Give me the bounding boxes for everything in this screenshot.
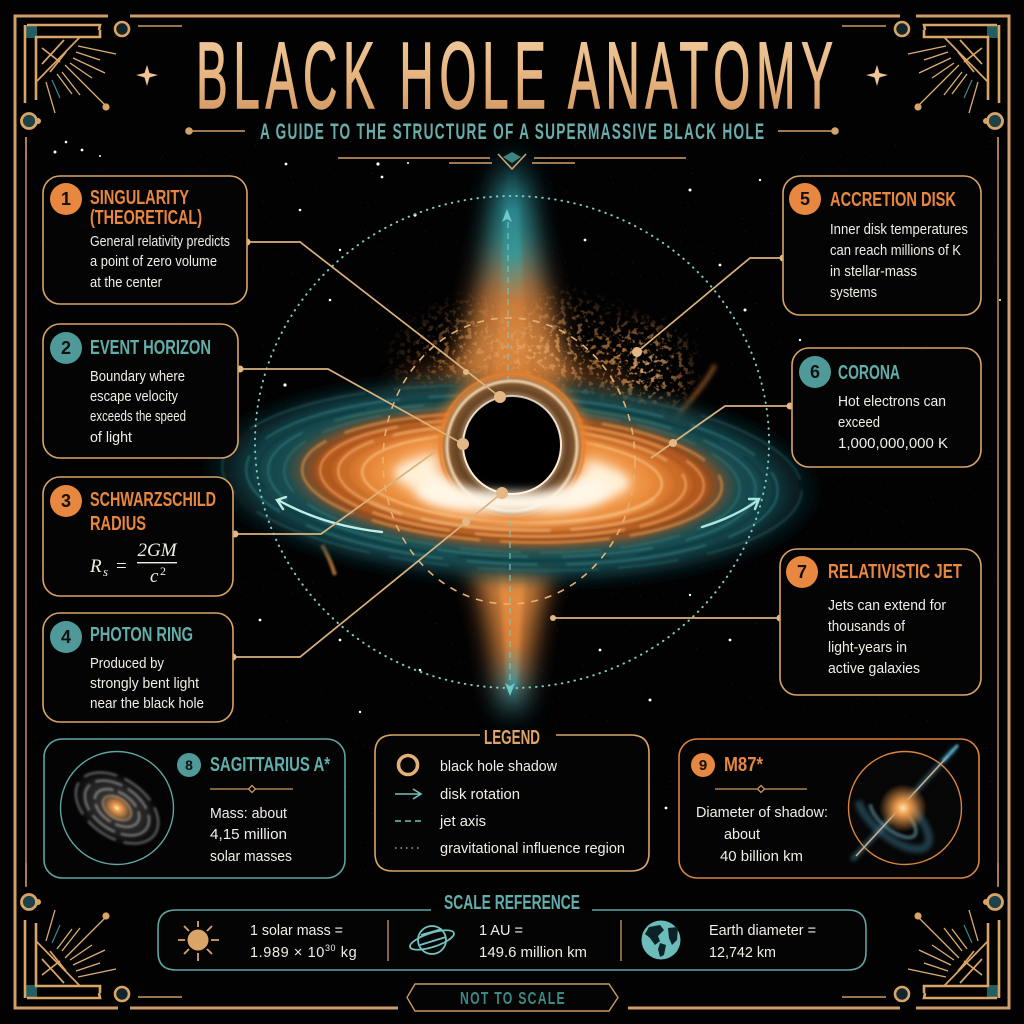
body 2: exceeds the speed	[90, 409, 186, 425]
badge 8	[177, 753, 201, 777]
legend: black hole shadow	[398, 756, 558, 775]
astronomical unit text	[479, 923, 587, 961]
panel 5: accretion disk	[783, 176, 981, 315]
body 5: can reach millions of K	[830, 243, 961, 259]
badge 8: 8	[185, 757, 193, 773]
body 1: General relativity predicts	[90, 234, 230, 250]
photon ring and shadow	[434, 368, 590, 524]
corner ornament: bottom left	[22, 863, 182, 1001]
lensed ring annulus	[442, 376, 582, 516]
badge 3: 3	[61, 491, 71, 511]
panel 9: m87*	[679, 739, 979, 878]
disk rotation arrow: right	[702, 499, 759, 527]
legend: jet axis	[395, 814, 486, 830]
jet arrow: down	[505, 683, 515, 696]
solar mass text: 30	[325, 943, 336, 953]
badge 9: 9	[699, 757, 707, 774]
body 8: 4,15 million	[210, 827, 287, 843]
gravitational influence boundary	[255, 196, 769, 688]
heading 7: RELATIVISTIC JET	[828, 561, 962, 583]
panel: legend	[375, 727, 649, 871]
heading 4: PHOTON RING	[90, 624, 193, 646]
jet axis lines	[508, 222, 510, 680]
panel: scale reference	[158, 910, 866, 970]
body 7: Jets can extend for	[828, 598, 946, 614]
solar mass text: 1 solar mass =	[250, 923, 343, 939]
jet: lower	[460, 530, 564, 720]
star ornament left	[136, 65, 158, 86]
legend: disk rotation: disk rotation	[440, 787, 520, 803]
body 2: of light	[90, 430, 132, 446]
front of disk crossing the ring	[370, 476, 655, 526]
badge 6: 6	[810, 362, 820, 382]
body 8: solar masses	[210, 849, 292, 865]
heading 2: EVENT HORIZON	[90, 337, 211, 359]
body 4: near the black hole	[90, 696, 204, 712]
scale reference heading: SCALE REFERENCE	[444, 892, 580, 914]
formula: R	[89, 556, 102, 577]
solar mass text	[250, 923, 357, 961]
schwarzschild radius dashed circle	[383, 318, 635, 604]
legend: disk rotation	[395, 787, 520, 803]
body 2	[90, 369, 186, 446]
heading 1: SINGULARITY	[90, 187, 189, 209]
frame inner lines	[26, 137, 998, 887]
body 7: thousands of	[828, 619, 906, 635]
body 5: Inner disk temperatures	[830, 222, 968, 238]
badge 7: 7	[797, 562, 807, 582]
corner ornament: top left	[22, 22, 182, 160]
body 9: 40 billion km	[720, 849, 803, 865]
icon: earth	[642, 920, 680, 960]
body 5	[830, 222, 968, 301]
badge 2: 2	[61, 338, 71, 358]
event horizon line	[463, 396, 561, 494]
formula: c	[150, 566, 159, 587]
heading 3: RADIUS	[90, 513, 146, 535]
body 2: escape velocity	[90, 389, 179, 405]
jet arrow: up	[502, 209, 512, 222]
astronomical unit text: 1 AU =	[479, 923, 523, 939]
body 9	[696, 805, 828, 865]
badge 7	[786, 556, 818, 588]
heading 1	[90, 187, 202, 229]
divider 8	[210, 786, 293, 792]
body 1: at the center	[90, 275, 162, 291]
icon: planet	[408, 926, 456, 954]
body 7: light-years in	[828, 640, 907, 656]
earth diameter text	[709, 923, 816, 961]
black hole shadow	[467, 398, 557, 488]
bright stars	[54, 141, 1001, 809]
body 6	[838, 394, 948, 452]
earth diameter text: 12,742 km	[709, 945, 776, 961]
accretion disk	[195, 358, 828, 602]
badge 9	[691, 753, 715, 777]
body 9: about	[724, 827, 760, 843]
legend: gravitational influence region: gravitational influence region	[440, 841, 625, 857]
formula	[89, 540, 178, 587]
panel 3: schwarzschild radius	[43, 477, 233, 596]
astronomical unit text: 149.6 million km	[479, 945, 587, 961]
corner ornament: bottom right	[842, 863, 1002, 1001]
body 7	[828, 598, 946, 677]
panel 8: sagittarius a*	[44, 739, 345, 878]
panel 1: singularity	[43, 176, 247, 304]
body 4: strongly bent light	[90, 676, 199, 692]
title: BLACK HOLE ANATOMY	[196, 22, 833, 128]
formula: 2	[160, 564, 166, 578]
body 8: Mass: about	[210, 806, 287, 822]
icon: sun	[178, 921, 219, 961]
badge 4: 4	[61, 627, 71, 647]
not to scale banner: NOT TO SCALE	[460, 989, 565, 1009]
formula: =	[116, 556, 127, 577]
badge 1	[50, 183, 82, 215]
body 9: Diameter of shadow:	[696, 805, 828, 821]
heading 1: (THEORETICAL)	[90, 207, 202, 229]
formula: s	[103, 564, 108, 579]
separator	[620, 920, 622, 961]
leader dots	[230, 238, 794, 660]
badge 4	[50, 621, 82, 653]
body 5: in stellar-mass	[830, 264, 917, 280]
body 5: systems	[830, 285, 877, 301]
heading 5: ACCRETION DISK	[830, 189, 956, 211]
earth diameter text: Earth diameter =	[709, 923, 816, 939]
panel 2: event horizon	[43, 324, 238, 458]
subtitle: A GUIDE TO THE STRUCTURE OF A SUPERMASSIVE BLACK HOLE	[260, 119, 764, 144]
m87 image	[847, 745, 962, 864]
legend: jet axis: jet axis	[439, 814, 486, 830]
formula: 2GM	[137, 540, 178, 561]
panel 6: corona	[792, 348, 981, 467]
disk rotation arrow: left	[277, 497, 382, 532]
jet: upper	[450, 150, 574, 392]
body 2: Boundary where	[90, 369, 185, 385]
separator	[387, 920, 389, 961]
galaxy image	[57, 752, 177, 864]
white hot inner disk	[393, 446, 631, 510]
badge 1: 1	[61, 189, 71, 209]
badge 2	[50, 332, 82, 364]
heading 9: M87*	[724, 754, 763, 776]
glow behind ring	[434, 368, 590, 524]
body 6: Hot electrons can	[838, 394, 946, 410]
body 6: 1,000,000,000 K	[838, 436, 948, 452]
badge 5: 5	[800, 189, 810, 209]
badge 5	[789, 183, 821, 215]
heading 3	[90, 489, 216, 535]
not to scale banner	[407, 984, 618, 1011]
leader lines	[233, 242, 790, 657]
divider 9	[715, 786, 807, 792]
legend: black hole shadow: black hole shadow	[440, 759, 558, 775]
badge 3	[50, 485, 82, 517]
heading 6: CORONA	[838, 362, 900, 384]
star ornament right	[866, 65, 888, 86]
heading 3: SCHWARZSCHILD	[90, 489, 216, 511]
orange mid disk	[281, 394, 743, 562]
dust cloud above disk	[322, 280, 715, 575]
badge 6	[799, 356, 831, 388]
solar mass text: 1.989 × 10	[250, 945, 325, 961]
body 1	[90, 234, 230, 291]
subtitle flourishes	[186, 128, 838, 169]
body 4	[90, 656, 204, 712]
body 6: exceed	[838, 415, 880, 431]
teal outer disk	[195, 358, 828, 602]
body 1: a point of zero volume	[90, 254, 217, 270]
heading 8: SAGITTARIUS A*	[210, 754, 330, 776]
body 4: Produced by	[90, 656, 165, 672]
solar mass text: kg	[336, 945, 357, 961]
body 7: active galaxies	[828, 661, 920, 677]
star field	[30, 140, 994, 880]
corner ornament: top right	[842, 22, 1002, 160]
legend title: LEGEND	[484, 727, 540, 749]
body 8	[210, 806, 292, 865]
panel 4: photon ring	[43, 613, 233, 722]
shadow glow	[460, 393, 564, 497]
panel 7: relativistic jet	[780, 549, 981, 695]
